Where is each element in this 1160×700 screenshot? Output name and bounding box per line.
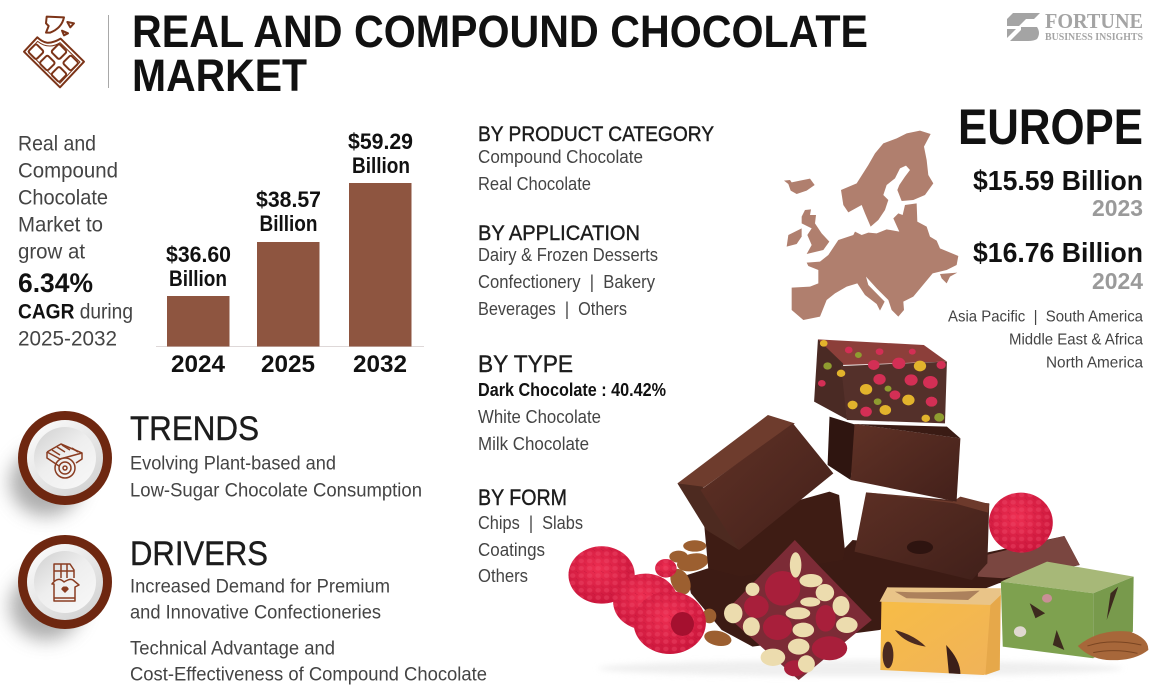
raspberry: far left: [568, 546, 635, 604]
raspberry: front: [634, 591, 706, 654]
bar 2032: $59.29: [348, 129, 413, 154]
text block: other regions: Asia Pacific | South America: [948, 308, 1143, 326]
segment: by application: BY APPLICATION: [478, 222, 640, 245]
raspberry: small back: [655, 559, 677, 578]
bar 2024: [166, 242, 231, 378]
text block: market growth summary: Market to: [18, 214, 103, 236]
bar 2025: [256, 187, 321, 378]
pink-topped slab: [978, 536, 1080, 578]
segment: by form: Chips | Slabs: [478, 513, 583, 533]
logo: Fortune Business Insights: BUSINESS INSIGHTS: [1045, 32, 1143, 43]
text block: market growth summary: 6.34%: [18, 268, 93, 298]
nut bar: [724, 540, 872, 680]
segment: by type: Milk Chocolate: [478, 434, 589, 454]
segment: by type: Dark Chocolate : 40.42%: [478, 380, 666, 400]
segment: by application: Dairy & Frozen Desserts: [478, 245, 658, 265]
nuts: [667, 540, 733, 648]
text block: drivers: Increased Demand for Premium: [130, 576, 390, 598]
segment: by application: Beverages | Others: [478, 299, 627, 319]
image: chocolate pile with raspberries: [568, 339, 1148, 680]
segment: by form: [478, 485, 583, 586]
raspberry: middle: [613, 574, 678, 630]
stat: Europe 2024: 2024: [1092, 268, 1143, 294]
segment: by product category: BY PRODUCT CATEGORY: [478, 123, 714, 146]
segment: by form: BY FORM: [478, 485, 567, 510]
icon: chocolate bar logo: [24, 17, 84, 87]
segment: by product category: Compound Chocolate: [478, 147, 643, 167]
sprinkled block: [814, 339, 947, 423]
middle top block: [828, 417, 960, 502]
segment: by form: Others: [478, 566, 528, 586]
title: MARKET: [132, 50, 307, 101]
title: [132, 6, 868, 101]
divider: [108, 15, 109, 88]
text block: market growth summary: Compound: [18, 160, 118, 182]
bar 2025: 2025: [261, 351, 315, 378]
logo: Fortune Business Insights: [1007, 9, 1143, 43]
segment: by product category: [478, 123, 714, 194]
segment: by form: Coatings: [478, 540, 545, 560]
stat: Europe 2024: [973, 237, 1143, 294]
text block: trends: Low-Sugar Chocolate Consumption: [130, 480, 422, 502]
bar 2024: 2024: [171, 351, 226, 378]
text block: drivers: and Innovative Confectioneries: [130, 602, 381, 624]
green block: [1001, 562, 1134, 658]
tilted block: [677, 415, 833, 550]
title: REAL AND COMPOUND CHOCOLATE: [132, 6, 868, 57]
bar 2025: $38.57: [256, 187, 321, 212]
back slabs: [687, 536, 1080, 647]
text block: trends: [130, 454, 422, 502]
bar 2032: [348, 129, 413, 378]
text block: market growth summary: Chocolate: [18, 186, 108, 210]
ground shadow: [598, 660, 1122, 676]
segment: by type: White Chocolate: [478, 407, 601, 427]
bar 2032: 2032: [353, 351, 407, 378]
text block: drivers: Cost-Effectiveness of Compound Chocolate: [130, 664, 487, 686]
heading: drivers: DRIVERS: [130, 535, 268, 573]
text block: trends: Evolving Plant-based and: [130, 454, 336, 474]
logo: Fortune Business Insights: FORTUNE: [1045, 9, 1143, 33]
bar 2032: Billion: [352, 153, 410, 178]
bar chart: [156, 129, 424, 378]
icon: drivers badge: [10, 535, 112, 640]
text block: other regions: North America: [1046, 354, 1143, 372]
segment: by type: BY TYPE: [478, 351, 573, 378]
text block: other regions: [948, 308, 1143, 372]
text block: drivers: [130, 576, 487, 686]
dark block behind: [704, 492, 845, 577]
text block: market growth summary: [18, 132, 133, 350]
heading: trends: TRENDS: [130, 410, 259, 448]
segment: by product category: Real Chocolate: [478, 174, 591, 194]
bar 2024: Billion: [169, 266, 227, 291]
raspberry: right: [989, 493, 1053, 553]
stat: Europe 2023: 2023: [1092, 195, 1143, 221]
bar 2024: $36.60: [166, 242, 231, 267]
segment: by application: Confectionery | Bakery: [478, 272, 655, 292]
text block: market growth summary: grow at: [18, 240, 85, 264]
text block: other regions: Middle East & Africa: [1009, 332, 1143, 348]
almond: [1078, 631, 1148, 660]
bar 2025: Billion: [260, 211, 318, 236]
segment: by application: [478, 222, 658, 319]
map: Europe: [784, 131, 958, 320]
segment: by type: [478, 351, 666, 454]
right lower block: [855, 492, 989, 580]
stat: Europe 2023: [973, 165, 1143, 221]
text block: market growth summary: 2025-2032: [18, 328, 117, 350]
stat: Europe 2024: $16.76 Billion: [973, 237, 1143, 268]
text block: market growth summary: Real and: [18, 132, 96, 156]
icon: trends badge: [10, 411, 112, 516]
yellow block: [880, 587, 1001, 675]
text block: market growth summary: CAGR during: [18, 300, 133, 324]
text block: drivers: Technical Advantage and: [130, 638, 335, 660]
stat: Europe 2023: $15.59 Billion: [973, 165, 1143, 196]
